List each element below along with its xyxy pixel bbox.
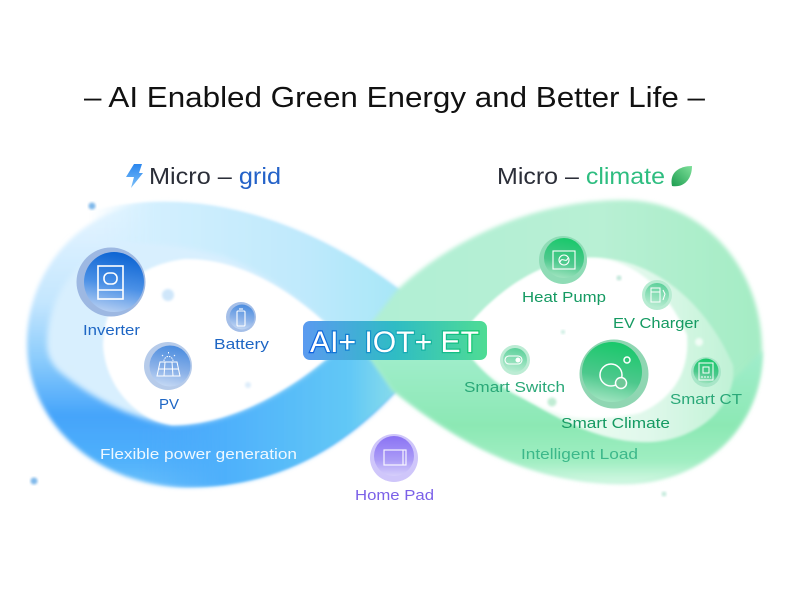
icon: EV charger [651, 288, 665, 302]
decorative bubbles [30, 202, 703, 496]
label: flexible power generation: Flexible power generation [100, 446, 297, 463]
icon: tablet [384, 450, 406, 465]
badge: AI + IOT + ET: AI+ IOT+ ET [310, 326, 479, 359]
node: PV [144, 342, 192, 413]
icon: meter [699, 363, 713, 380]
node: smart switch [464, 345, 565, 396]
node: home pad: Home Pad [355, 487, 434, 504]
node: smart climate [561, 340, 670, 432]
node: smart CT [670, 357, 742, 408]
node: battery [214, 302, 270, 353]
icon: heat pump [553, 251, 575, 269]
icon: solar panel [157, 352, 180, 376]
title: – AI Enabled Green Energy and Better Life – [84, 82, 706, 114]
heading: micro-climate: Micro – climate [497, 163, 665, 189]
node: smart switch: Smart Switch [464, 379, 565, 396]
infinity loop [27, 200, 762, 487]
node: PV: PV [159, 396, 179, 413]
inner hole [458, 258, 687, 418]
inner hole [103, 259, 345, 425]
icon: lightning bolt [126, 164, 143, 188]
node: inverter [76, 248, 146, 339]
node: smart climate: Smart Climate [561, 415, 670, 432]
node: heat pump [522, 236, 606, 306]
icon: leaf [672, 166, 692, 186]
node: home pad [355, 434, 434, 504]
left loop: blue [27, 202, 440, 487]
node: smart CT: Smart CT [670, 391, 742, 408]
heading: micro-grid: Micro – grid [149, 163, 281, 189]
right loop: green [358, 200, 762, 483]
icon: inverter [98, 266, 123, 299]
label: intelligent load: Intelligent Load [521, 446, 638, 463]
inner light lobe [47, 244, 345, 425]
node: EV charger: EV Charger [613, 315, 699, 332]
icon: climate rings [600, 357, 630, 388]
icon: switch [505, 356, 522, 364]
icon: battery [237, 309, 245, 326]
node: inverter: Inverter [83, 322, 140, 339]
inner light lobe [458, 258, 733, 442]
node: heat pump: Heat Pump [522, 289, 606, 306]
node: EV charger [613, 280, 699, 332]
node: battery: Battery [214, 336, 270, 353]
